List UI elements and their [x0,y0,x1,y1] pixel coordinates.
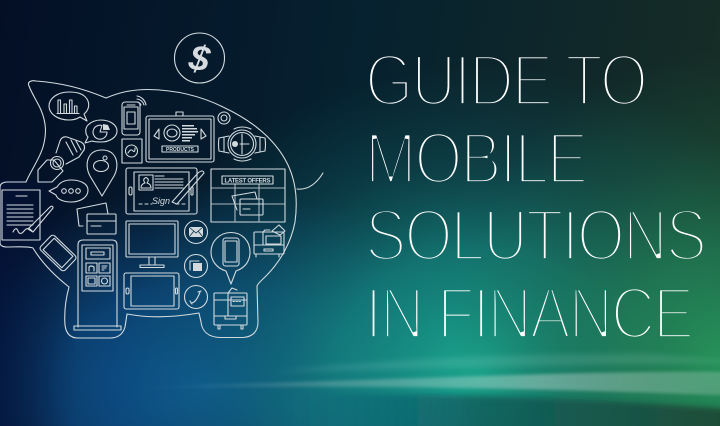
icon: products tablet: PRODUCTS [166,147,195,153]
icon: tablet with signature: Sign [152,196,170,206]
icon: credit cards [77,203,116,234]
title: GUIDE TO [365,40,646,122]
icon: tablet with signature [126,168,204,214]
icon: large printer [214,288,247,329]
title: MOBILE [365,118,586,200]
icon: square with dollar [122,139,142,163]
icon: chat circle [184,254,208,278]
piggy tail [297,173,323,189]
bubble: pie chart [85,120,117,143]
bubble: smartphone [211,232,250,284]
bubble: ellipsis [49,180,88,202]
icon: tablet [124,273,179,309]
icon: products tablet [146,112,214,162]
icon: smartphone tilted [39,234,77,272]
icon: small gear circle [218,112,230,124]
piggy bank outline [0,81,296,338]
panel: latest offers [211,169,285,222]
bubble: bar chart [49,92,89,121]
icon: print phone with wifi [122,96,146,135]
icon: kiosk terminal [74,240,121,330]
icon: location pin with piggy [87,150,117,196]
icon: small printer [254,225,285,257]
icon: desktop monitor [126,221,178,268]
coin icon with dollar sign: $ [185,36,214,80]
coin icon with dollar sign [174,33,224,83]
icon: envelope circle [184,220,208,244]
icon: signed document [2,190,53,240]
icon: phone circle [184,286,208,308]
icon: smartwatch on hand [38,137,85,182]
icon: wrist watch [218,127,266,161]
title [365,40,705,354]
panel: latest offers: LATEST OFFERS [224,178,270,184]
